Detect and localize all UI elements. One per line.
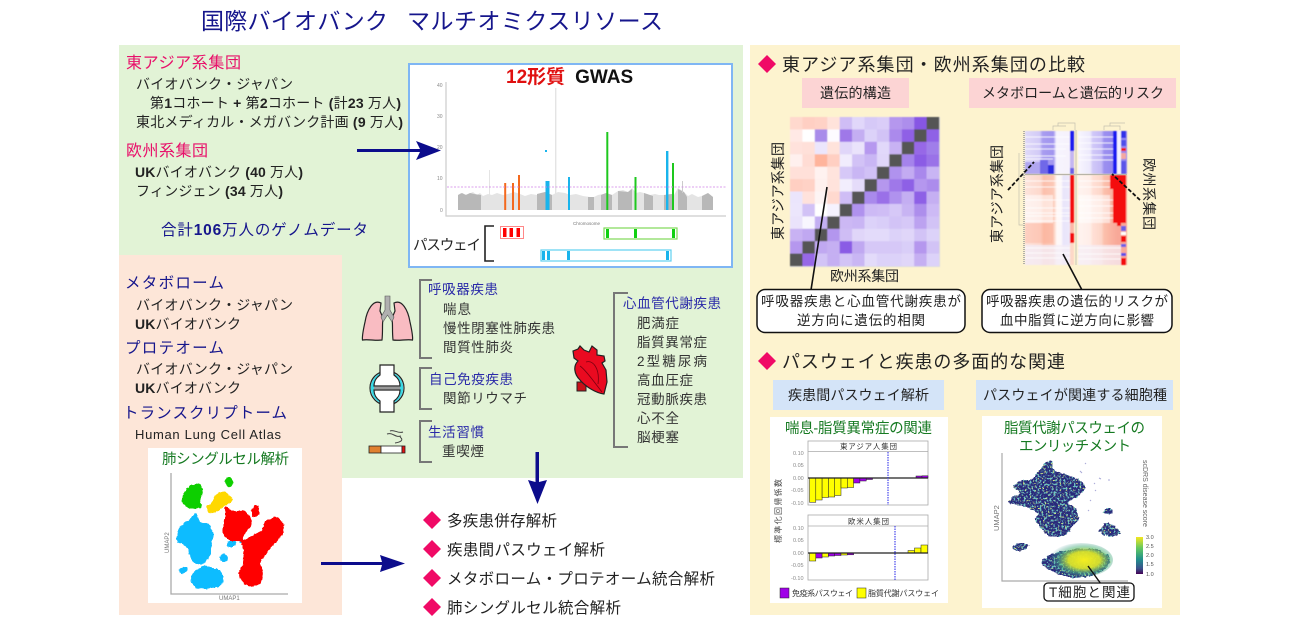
heading: lung single cell: 肺シングルセル解析 <box>162 451 289 468</box>
heatmap: East Asian <box>1025 131 1074 265</box>
chart: Manhattan plot: 10 <box>437 176 443 182</box>
chart: genetic correlation heatmap <box>790 117 940 267</box>
chart: metabolome heatmaps <box>1019 123 1127 265</box>
heading: transcriptome: トランスクリプトーム <box>123 404 287 422</box>
heading: East Asian: 東アジア系集団 <box>126 54 241 72</box>
heading: enrichment: 脂質代謝パスウェイの <box>1004 419 1145 437</box>
legend: 免疫系パスウェイ <box>792 588 853 598</box>
chart: UMAP <box>171 473 288 594</box>
axis labels: 0.05 <box>793 538 804 544</box>
leader: heatmap callout <box>1063 254 1082 290</box>
text: UKB: UKバイオバンク <box>135 316 241 332</box>
colorbar: 2.0 <box>1146 553 1154 559</box>
chart: Manhattan plot: Chromosome <box>573 221 601 226</box>
item: T2D: 2型糖尿病 <box>637 354 707 369</box>
item: RA: 関節リウマチ <box>443 390 527 406</box>
axis labels: 0.00 <box>793 476 804 482</box>
callout: genetic correlation: 呼吸器疾患と心血管代謝疾患が <box>761 294 962 309</box>
list: analyses <box>423 511 715 617</box>
colorbar: 1.0 <box>1146 572 1154 578</box>
label: y axis: 標準化回帰係数 <box>773 479 783 543</box>
label: UMAP2: UMAP2 <box>165 532 171 553</box>
chart: European bars: 欧米人集団 <box>848 516 889 526</box>
tag: cell type: パスウェイが関連する細胞種 <box>983 387 1167 403</box>
arrow: diseases to analyses <box>528 452 547 504</box>
leader: T cell <box>1088 566 1101 584</box>
pathway bar: red <box>500 226 524 238</box>
heading: asthma dyslipidemia: 喘息-脂質異常症の関連 <box>785 419 932 437</box>
legend <box>780 588 939 598</box>
text: BBJ 2: バイオバンク・ジャパン <box>136 361 293 377</box>
label: UMAP2: UMAP2 <box>992 505 1001 531</box>
callout: genetic correlation <box>757 290 965 332</box>
arrow: single cell to analyses <box>321 555 405 572</box>
item: asthma: 喘息 <box>443 301 472 317</box>
axis labels: 0.00 <box>793 551 804 557</box>
heading: enrichment <box>1004 419 1145 455</box>
heading: comparison: 東アジア系集団・欧州系集団の比較 <box>782 55 1085 75</box>
callout: metabolome: 血中脂質に逆方向に影響 <box>1000 313 1154 328</box>
text: HLCA: Human Lung Cell Atlas <box>135 427 282 442</box>
chart: East Asian bars <box>808 441 928 505</box>
axis labels: -0.10 <box>791 576 804 582</box>
chart: Manhattan plot: 0 <box>440 208 443 214</box>
list: autoimmune <box>420 368 527 409</box>
tag: cell type <box>976 380 1173 410</box>
colorbar: 3.0 <box>1146 535 1154 541</box>
item: smoking: 重喫煙 <box>442 444 484 459</box>
label: UMAP1: UMAP1 <box>219 596 240 602</box>
text: FinnGen: フィンジェン (34 万人) <box>136 183 283 199</box>
colorbar <box>1136 535 1154 578</box>
text: BBJ: バイオバンク・ジャパン <box>136 297 293 313</box>
icon: cigarette <box>369 431 405 453</box>
axis labels <box>791 451 804 582</box>
tag: metabolome risk: メタボロームと遺伝的リスク <box>982 85 1164 101</box>
list: cardiometabolic <box>614 293 721 447</box>
chart: Manhattan plot: 20 <box>437 145 443 151</box>
panel: cohorts background <box>119 45 743 478</box>
axis labels: -0.10 <box>791 501 804 507</box>
chart: Manhattan plot: 40 <box>437 83 443 89</box>
text block: omics <box>123 274 293 442</box>
label: lifestyle: 生活習慣 <box>428 425 484 440</box>
label: European axis: 欧州系集団 <box>830 268 899 284</box>
callout: metabolome <box>982 290 1172 332</box>
item: CAD: 冠動脈疾患 <box>637 392 707 407</box>
list: respiratory diseases <box>420 280 555 358</box>
heading: metabolome: メタボローム <box>125 274 224 292</box>
title: 国際バイオバンク <box>201 8 388 34</box>
chart: score UMAP <box>1002 453 1128 581</box>
text: UK Biobank: UKバイオバンク (40 万人) <box>135 164 303 180</box>
heading: European: 欧州系集団 <box>126 142 208 160</box>
pathway bar: green <box>604 228 677 239</box>
item: metabolome proteome: メタボローム・プロテオーム統合解析 <box>447 570 715 588</box>
item: ILD: 間質性肺炎 <box>443 340 513 355</box>
chart: East Asian bars: 東アジア人集団 <box>840 441 897 451</box>
label: respiratory: 呼吸器疾患 <box>428 282 498 297</box>
text block: cohorts <box>126 54 403 239</box>
item: stroke: 脳梗塞 <box>637 430 680 445</box>
leader: dashed European <box>1112 174 1140 200</box>
axis labels: -0.05 <box>791 563 804 569</box>
text: cohorts 1 and 2: 第1コホート + 第2コホート (計23 万人) <box>150 95 401 111</box>
label: European: 欧州系集団 <box>1141 158 1157 230</box>
panel: omics background <box>119 255 342 615</box>
panel: comparison background <box>750 45 1180 615</box>
heatmap: European <box>1078 131 1127 265</box>
axis labels: -0.05 <box>791 488 804 494</box>
item: HF: 心不全 <box>637 411 680 426</box>
item: lung single cell: 肺シングルセル統合解析 <box>447 599 621 617</box>
tag: genetic architecture: 遺伝的構造 <box>820 85 891 101</box>
item: comorbidity: 多疾患併存解析 <box>447 512 557 530</box>
tag: cross disease pathway: 疾患間パスウェイ解析 <box>788 387 929 403</box>
chart: Manhattan plot <box>437 82 726 226</box>
axis labels: 0.05 <box>793 463 804 469</box>
title: マルチオミクスリソース <box>407 8 663 34</box>
heading: pathway and disease: パスウェイと疾患の多面的な関連 <box>782 352 1065 372</box>
colorbar: 1.5 <box>1146 562 1154 568</box>
tag: metabolome risk <box>969 78 1176 108</box>
leader: dashed East Asian <box>1008 162 1034 190</box>
tag: cross disease pathway <box>773 380 944 410</box>
panel: lung single cell <box>148 448 302 603</box>
chart: Manhattan plot: 30 <box>437 114 443 120</box>
label: cardiometabolic: 心血管代謝疾患 <box>623 296 721 311</box>
item: hypertension: 高血圧症 <box>637 372 693 388</box>
icon: joint <box>370 365 404 412</box>
axis labels: 0.10 <box>793 526 804 532</box>
title <box>201 8 663 34</box>
leader: heatmap to callout <box>811 187 827 290</box>
icon: heart <box>573 346 607 394</box>
heading: proteome: プロテオーム <box>125 339 224 357</box>
heading: GWAS: 12形質 GWAS <box>506 66 633 88</box>
item: obesity: 肥満症 <box>637 316 679 331</box>
label: autoimmune: 自己免疫疾患 <box>429 372 513 387</box>
axis labels: 0.10 <box>793 451 804 457</box>
chart: European bars <box>808 515 928 580</box>
callout: T cell: T細胞と関連 <box>1049 585 1130 600</box>
colorbar: 2.5 <box>1146 544 1154 550</box>
pathway bar: blue <box>541 250 671 261</box>
heading: enrichment: エンリッチメント <box>1019 439 1131 455</box>
item: COPD: 慢性閉塞性肺疾患 <box>443 320 555 336</box>
item: cross-disease pathway: 疾患間パスウェイ解析 <box>447 541 605 559</box>
panel: enrichment UMAP <box>982 416 1162 608</box>
text: Biobank Japan: バイオバンク・ジャパン <box>136 76 293 92</box>
text: UKB 2: UKバイオバンク <box>135 380 241 396</box>
label: pathway: パスウェイ <box>413 237 481 254</box>
label: scDRS: scDRS disease score <box>1141 460 1148 527</box>
text: Tohoku: 東北メディカル・メガバンク計画 (9 万人) <box>136 114 403 130</box>
callout: genetic correlation: 逆方向に遺伝的相関 <box>797 313 925 328</box>
bracket: pathway <box>485 226 494 261</box>
icon: lungs <box>362 296 413 340</box>
list: lifestyle <box>420 421 484 462</box>
arrow: cohorts to GWAS <box>357 141 441 160</box>
legend: 脂質代謝パスウェイ <box>868 588 939 598</box>
label: East Asian: 東アジア系集団 <box>989 145 1005 243</box>
callout: metabolome: 呼吸器疾患の遺伝的リスクが <box>986 294 1168 309</box>
tag: genetic architecture <box>802 78 909 108</box>
panel: GWAS <box>409 64 732 267</box>
text: total: 合計106万人のゲノムデータ <box>161 220 368 239</box>
item: dyslipidemia: 脂質異常症 <box>637 335 707 350</box>
label: East Asian axis: 東アジア系集団 <box>770 142 786 240</box>
panel: bar chart <box>770 417 948 603</box>
